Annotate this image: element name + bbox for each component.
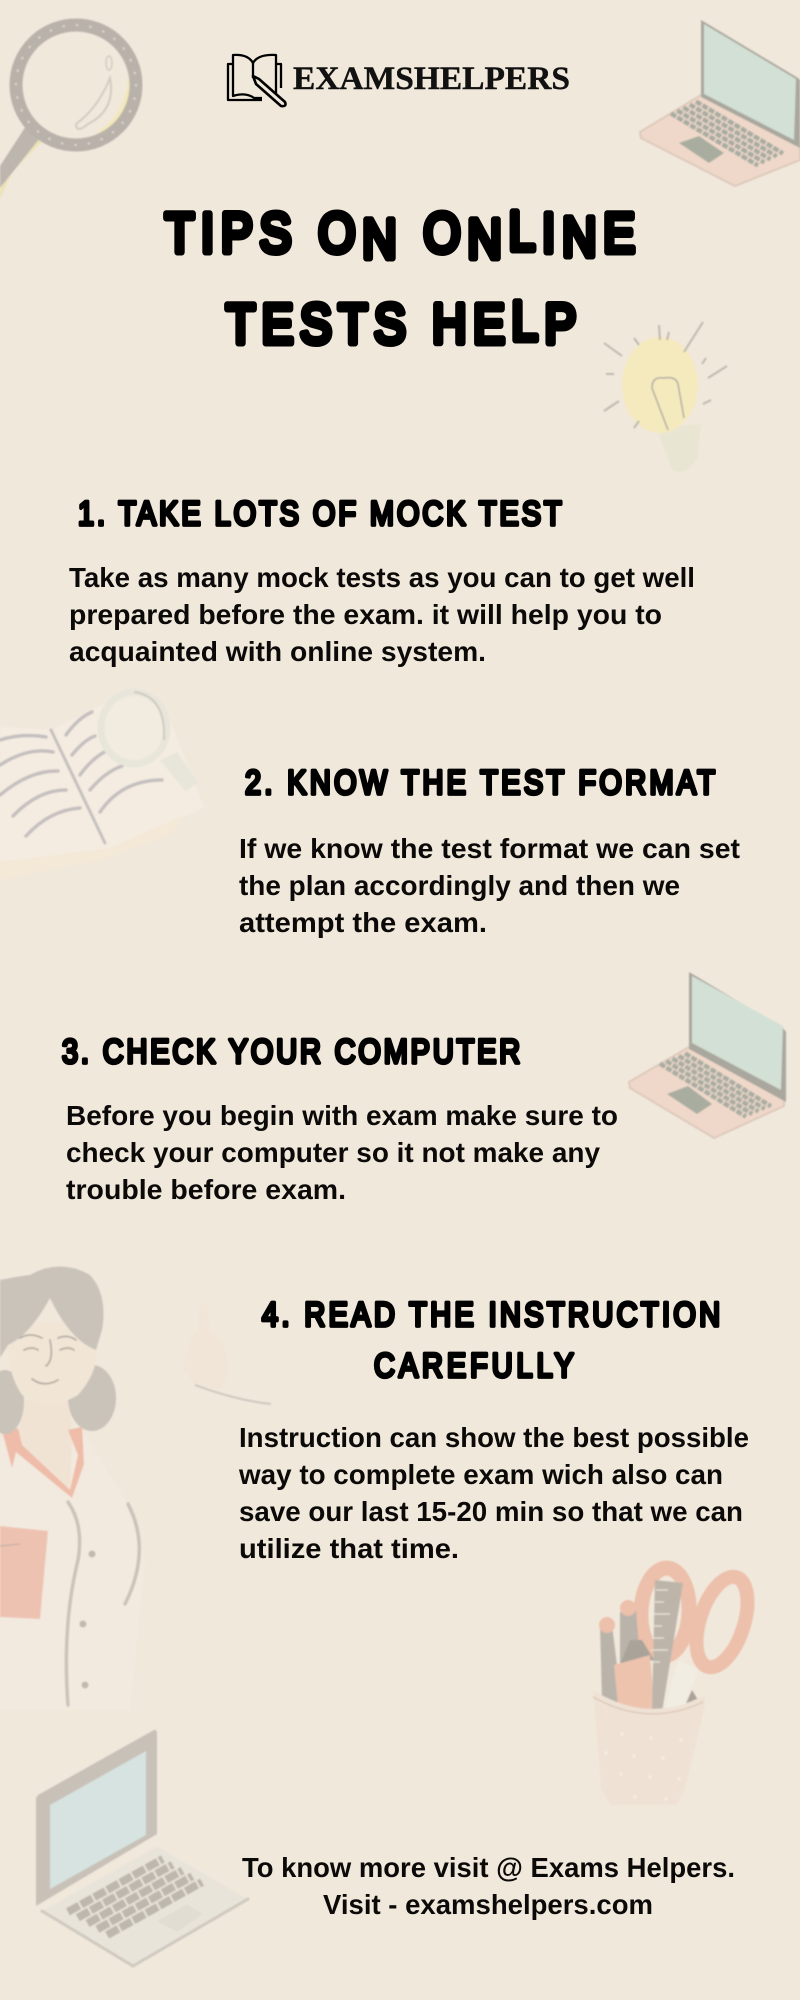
heading 4: 4. READ THE INSTRUCTION	[262, 1295, 720, 1334]
heading 3: 3. CHECK YOUR COMPUTER	[62, 1032, 520, 1071]
face	[7, 1321, 97, 1404]
text block 1: acquainted with online system.	[69, 636, 486, 667]
title: L	[509, 200, 535, 263]
title: TIPS O	[165, 202, 355, 265]
icon: laptop middle right	[629, 972, 786, 1138]
icon: light bulb	[604, 322, 727, 472]
title: N	[362, 208, 397, 271]
text block 3: Before you begin with exam make sure to	[66, 1100, 618, 1131]
heading 4	[262, 1295, 720, 1385]
text block 3: check your computer so it not make any	[66, 1137, 600, 1168]
title	[165, 200, 635, 356]
facial features	[20, 1335, 76, 1384]
neck and collar	[18, 1400, 72, 1495]
icon: laptop top right	[640, 20, 800, 186]
footer call to action: To know more visit @ Exams Helpers.	[242, 1852, 735, 1883]
title: E	[603, 202, 635, 265]
text block 1: Take as many mock tests as you can to get well	[69, 562, 695, 593]
buns	[68, 1365, 116, 1431]
illustration: woman in coat	[0, 1266, 271, 1710]
title: TESTS HE	[226, 293, 505, 356]
text block 4: save our last 15-20 min so that we can	[239, 1496, 743, 1527]
logo: Examshelpers: EXAMSHELPERS	[293, 61, 570, 97]
text block 4: way to complete exam wich also can	[238, 1459, 723, 1490]
title: L	[511, 290, 538, 353]
heading 1: 1. TAKE LOTS OF MOCK TEST	[78, 494, 562, 533]
footer call to action: Visit - examshelpers.com	[323, 1889, 653, 1920]
icon: open book and pencil	[228, 55, 286, 106]
text block 4	[238, 1422, 749, 1564]
text block 2: If we know the test format we can set	[239, 833, 740, 864]
icon: open book with magnifier	[0, 692, 204, 880]
raised hand	[183, 1303, 229, 1390]
title: N	[562, 206, 596, 269]
text block 2: the plan accordingly and then we	[239, 870, 680, 901]
text block 3	[66, 1100, 618, 1205]
section 1: take lots of mock test	[69, 494, 695, 667]
icon: pencil cup with scissors	[593, 1567, 757, 1805]
text block 2	[239, 833, 740, 938]
text block 1	[69, 562, 695, 667]
heading 4: CAREFULLY	[374, 1346, 574, 1385]
text block 4: Instruction can show the best possible	[239, 1422, 749, 1453]
section 2: know the test format	[239, 763, 740, 938]
pocket	[0, 1526, 48, 1619]
title: N	[467, 208, 502, 271]
title: O	[403, 202, 461, 265]
section 4: read the instruction carefully	[238, 1295, 749, 1564]
icon: magnifying glass	[0, 25, 136, 200]
coat lines	[66, 1502, 139, 1705]
text block 4: utilize that time.	[239, 1533, 459, 1564]
icon: laptop bottom left	[36, 1730, 248, 1966]
logo: Examshelpers	[228, 55, 570, 106]
title: I	[542, 202, 555, 265]
text block 1: prepared before the exam. it will help you to	[69, 599, 662, 630]
section 3: check your computer	[62, 1032, 618, 1205]
heading 2: 2. KNOW THE TEST FORMAT	[245, 763, 715, 802]
text block 2: attempt the exam.	[239, 907, 487, 938]
title: P	[544, 293, 576, 356]
text block 3: trouble before exam.	[66, 1174, 346, 1205]
hair	[0, 1266, 104, 1358]
footer call to action	[242, 1852, 735, 1920]
